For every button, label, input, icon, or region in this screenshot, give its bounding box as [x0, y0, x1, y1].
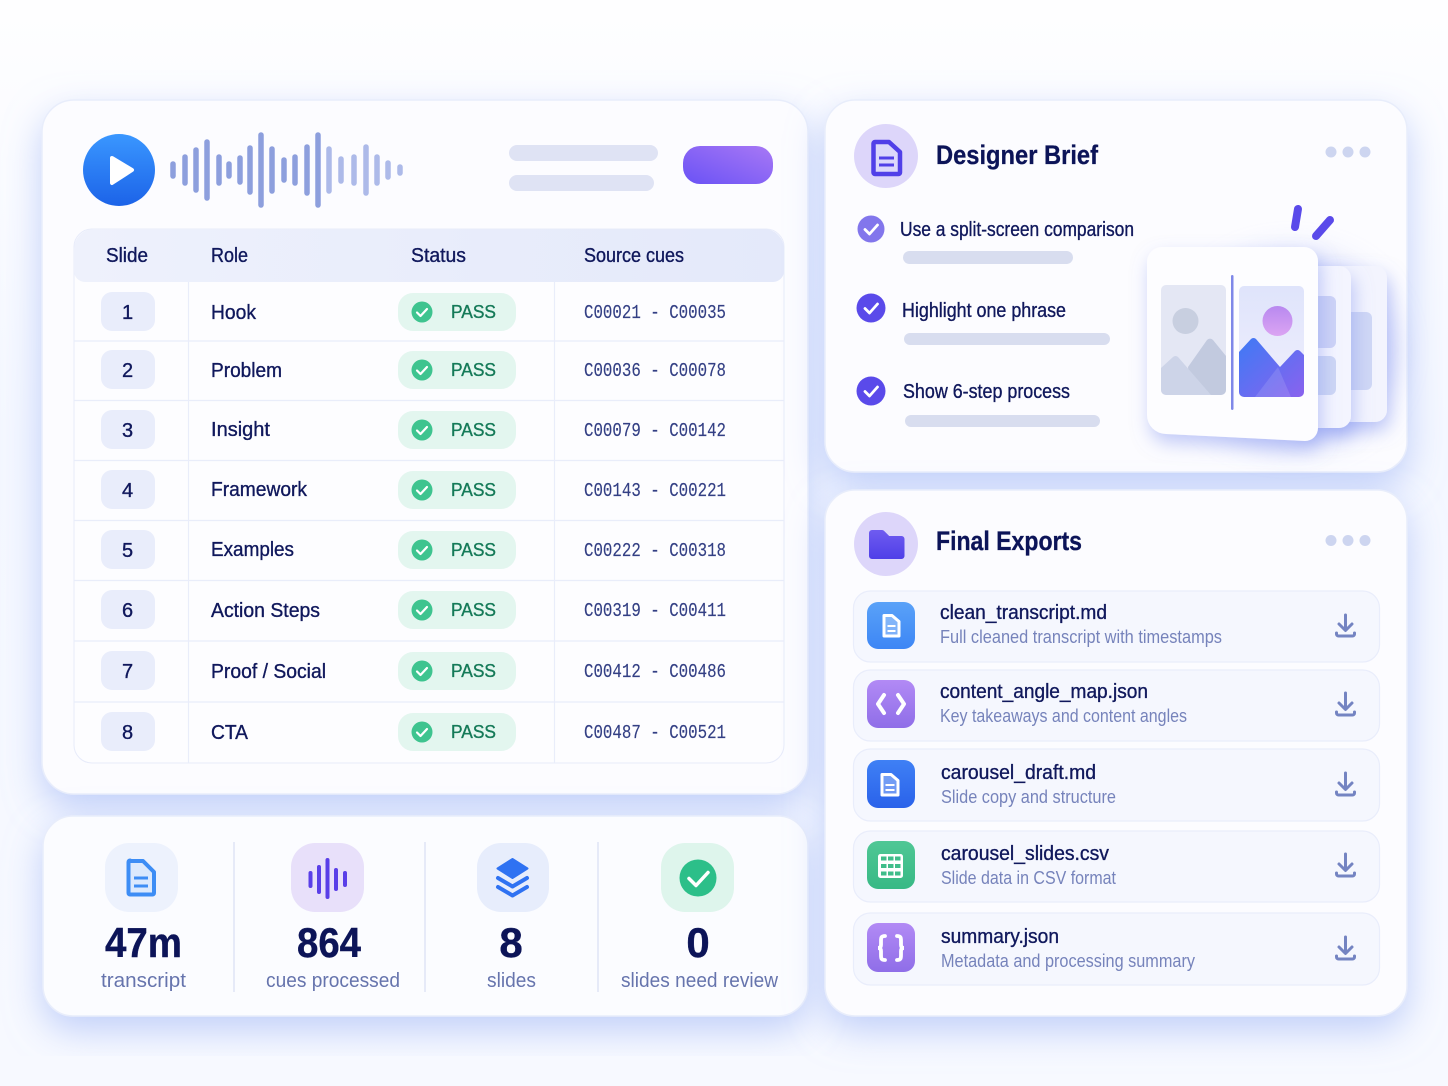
menu dots	[1326, 146, 1370, 158]
file: carousel_draft.md: Slide copy and structure	[941, 787, 1116, 807]
audio waveform	[173, 135, 400, 205]
file: carousel_slides.csv: Slide data in CSV format	[941, 868, 1116, 888]
row 1	[101, 292, 726, 331]
row 3: 3	[122, 420, 133, 442]
table header row: Status	[411, 245, 466, 267]
file: carousel_draft.md	[854, 749, 1380, 821]
checklist item 2	[856, 294, 1110, 345]
stat: transcript	[101, 843, 186, 992]
illustration: split-screen slide stack	[1147, 209, 1395, 445]
row 4: C00143 - C00221	[584, 480, 726, 502]
row 6: C00319 - C00411	[584, 600, 726, 622]
row 2: 2	[122, 360, 133, 382]
row 7: 7	[122, 661, 133, 683]
row 4: Framework	[211, 479, 308, 501]
file: carousel_slides.csv	[854, 831, 1380, 902]
row 8: 8	[122, 722, 133, 744]
heading: Final Exports	[936, 526, 1082, 556]
row 5: PASS	[451, 539, 496, 560]
row 8	[101, 712, 726, 751]
panel: final exports	[825, 490, 1407, 1016]
row 1: C00021 - C00035	[584, 302, 726, 324]
row 1: Hook	[211, 302, 257, 324]
icon: play button	[83, 134, 155, 206]
file: summary.json: Metadata and processing summary	[941, 951, 1195, 971]
row 2: Problem	[211, 360, 282, 382]
row 6: Action Steps	[211, 600, 320, 622]
divider	[1231, 275, 1234, 410]
stat: slides need review: 0	[686, 919, 710, 966]
stat: slides	[477, 843, 549, 992]
table header row	[106, 245, 684, 267]
stat: cues processed: cues processed	[266, 970, 400, 992]
row 3: Insight	[211, 419, 270, 441]
checklist item 2: Highlight one phrase	[902, 300, 1066, 322]
row 4: 4	[122, 480, 133, 502]
table header row: Slide	[106, 245, 148, 267]
row 4: PASS	[451, 479, 496, 500]
file: clean_transcript.md: Full cleaned transcript with timestamps	[940, 627, 1222, 647]
spark accents	[1295, 209, 1330, 236]
heading: Designer Brief	[936, 140, 1099, 170]
row 2: C00036 - C00078	[584, 360, 726, 382]
stat: slides: 8	[499, 919, 523, 966]
row 6: 6	[122, 600, 133, 622]
row 7: Proof / Social	[211, 661, 326, 683]
rear slide	[1320, 266, 1387, 422]
file: clean_transcript.md	[854, 591, 1380, 662]
row 6	[101, 590, 726, 629]
row 5: 5	[122, 540, 133, 562]
row 5: Examples	[211, 539, 294, 561]
panel: transcript table	[42, 100, 808, 794]
stat: cues processed: 864	[297, 919, 362, 966]
row 7	[101, 651, 726, 690]
after image	[1239, 286, 1304, 397]
checklist item 3	[856, 376, 1100, 427]
row 3	[101, 410, 726, 449]
row 6: PASS	[451, 599, 496, 620]
file: content_angle_map.json: content_angle_map.json	[940, 681, 1148, 703]
row 7: PASS	[451, 660, 496, 681]
file: summary.json	[854, 913, 1380, 985]
icon: folder in circle	[854, 512, 918, 576]
middle slide	[1290, 266, 1351, 428]
row 8: C00487 - C00521	[584, 722, 726, 744]
row 2	[101, 350, 726, 389]
row 5: C00222 - C00318	[584, 540, 726, 562]
blue glow behind slides	[1185, 255, 1395, 445]
file: content_angle_map.json	[854, 670, 1380, 741]
menu dots	[1326, 535, 1370, 546]
checklist item 1: Use a split-screen comparison	[900, 219, 1134, 241]
file: summary.json: summary.json	[941, 926, 1059, 948]
stat: slides need review: slides need review	[621, 970, 779, 992]
table	[74, 229, 784, 763]
file: carousel_draft.md: carousel_draft.md	[941, 762, 1096, 784]
checklist item 1	[858, 216, 1134, 264]
placeholder lines	[509, 145, 658, 191]
stat: cues processed	[266, 843, 400, 992]
checklist item 3: Show 6-step process	[903, 381, 1070, 403]
stat: transcript: 47m	[105, 919, 182, 966]
file: content_angle_map.json: Key takeaways and content angles	[940, 706, 1187, 726]
row 1: PASS	[451, 301, 496, 322]
stat: transcript: transcript	[101, 970, 186, 992]
row 7: C00412 - C00486	[584, 661, 726, 683]
row 3: PASS	[451, 419, 496, 440]
stat: slides need review	[621, 843, 779, 992]
before image	[1161, 285, 1226, 395]
row 5	[101, 530, 726, 569]
row 8: CTA	[211, 722, 249, 744]
panel: stats	[43, 816, 808, 1016]
front slide	[1147, 247, 1318, 441]
table header row: Role	[211, 245, 248, 267]
panel: designer brief	[825, 100, 1407, 472]
table header row: Source cues	[584, 245, 684, 267]
file: clean_transcript.md: clean_transcript.md	[940, 602, 1107, 624]
purple action pill	[683, 146, 773, 184]
row 2: PASS	[451, 359, 496, 380]
icon: document in circle	[854, 124, 918, 188]
stat: slides: slides	[487, 970, 536, 992]
row 8: PASS	[451, 721, 496, 742]
row 4	[101, 470, 726, 509]
row 1: 1	[122, 302, 133, 324]
row 3: C00079 - C00142	[584, 420, 726, 442]
file: carousel_slides.csv: carousel_slides.csv	[941, 843, 1109, 865]
